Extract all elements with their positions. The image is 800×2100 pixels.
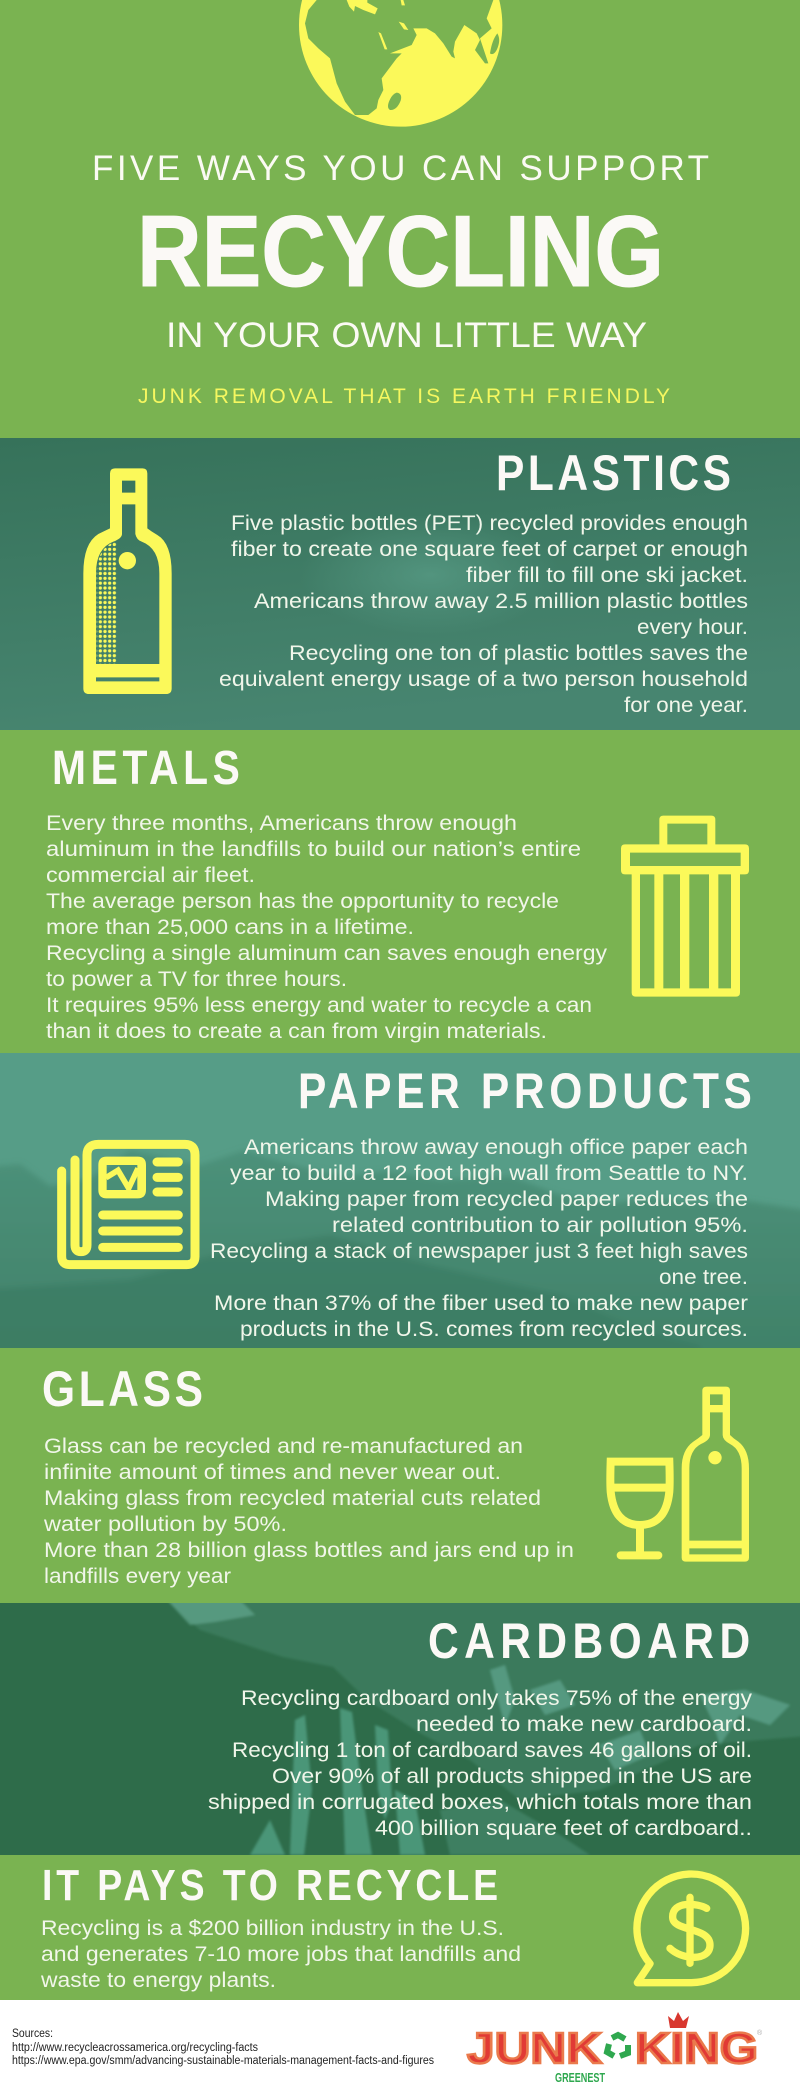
panel: paper products: [0, 1053, 800, 1370]
text block: paper facts: Americans throw away enough office paper each: [244, 1136, 748, 1159]
text block: cardboard facts: [208, 1687, 753, 1840]
text block: glass facts: Glass can be recycled and re-manufactured an: [44, 1435, 523, 1458]
panel: metals: [0, 730, 800, 1053]
heading: glass: GLASS: [42, 1361, 203, 1417]
text block: metals facts: to power a TV for three hours.: [46, 968, 347, 991]
heading: paper products: PAPER PRODUCTS: [298, 1063, 752, 1119]
icon: dollar speech bubble: [637, 1874, 746, 1983]
text block: cardboard facts: 400 billion square feet of cardboard..: [375, 1817, 752, 1840]
text block: metals facts: aluminum in the landfills to build our nation’s entire: [46, 838, 581, 861]
text block: paper facts: related contribution to air pollution 95%.: [332, 1214, 748, 1237]
text block: glass facts: infinite amount of times and never wear out.: [44, 1461, 501, 1484]
text block: sources: https://www.epa.gov/smm/advancing-sustainable-materials-management-facts-and-figures: [12, 2055, 434, 2067]
heading: it pays to recycle: IT PAYS TO RECYCLE: [42, 1860, 498, 1910]
text block: plastics facts: fiber to create one square feet of carpet or enough: [231, 538, 748, 561]
text block: glass facts: Making glass from recycled material cuts related: [44, 1487, 541, 1510]
logo: junk king: JUNK: [467, 2024, 602, 2073]
text block: paper facts: products in the U.S. comes from recycled sources.: [240, 1318, 748, 1341]
text block: metals facts: commercial air fleet.: [46, 864, 255, 887]
footer panel: [0, 2000, 800, 2100]
text block: paper facts: More than 37% of the fiber used to make new paper: [214, 1292, 748, 1315]
text block: cardboard facts: needed to make new cardboard.: [416, 1713, 752, 1736]
panel: it pays to recycle: [0, 1855, 800, 2000]
text block: cardboard facts: Recycling 1 ton of cardboard saves 46 gallons of oil.: [232, 1739, 752, 1762]
text block: pays facts: [40, 1917, 521, 1992]
text block: glass facts: water pollution by 50%.: [43, 1513, 287, 1536]
text block: paper facts: one tree.: [659, 1266, 748, 1289]
text block: plastics facts: fiber fill to fill one ski jacket.: [466, 564, 748, 587]
text block: pays facts: waste to energy plants.: [40, 1969, 276, 1992]
logo: junk king: [467, 2012, 763, 2085]
text block: plastics facts: equivalent energy usage of a two person household: [219, 668, 748, 691]
mountain backdrop: [167, 1600, 800, 1855]
text block: paper facts: Recycling a stack of newspaper just 3 feet high saves: [210, 1240, 748, 1263]
logo subtitle: GREENEST: [555, 2070, 605, 2085]
text block: plastics facts: [219, 512, 748, 717]
icon: plastic bottle: [83, 468, 172, 694]
text block: plastics facts: Five plastic bottles (PET) recycled provides enough: [231, 512, 748, 535]
icon: yellow globe: [299, 0, 502, 127]
main title: RECYCLING: [137, 196, 664, 308]
text block: cardboard facts: Recycling cardboard only takes 75% of the energy: [241, 1687, 753, 1710]
text block: paper facts: Making paper from recycled paper reduces the: [265, 1188, 748, 1211]
header panel: [0, 0, 800, 438]
icon: crown: [668, 2012, 689, 2028]
text block: glass facts: landfills every year: [44, 1565, 231, 1588]
logo: junk king: KING: [635, 2024, 758, 2073]
text block: pays facts: and generates 7-10 more jobs that landfills and: [41, 1943, 521, 1966]
text block: metals facts: than it does to create a can from virgin materials.: [46, 1020, 547, 1043]
heading: metals: METALS: [52, 742, 240, 795]
text block: metals facts: Every three months, Americans throw enough: [46, 812, 517, 835]
text block: pays facts: Recycling is a $200 billion industry in the U.S.: [41, 1917, 504, 1940]
panel: cardboard: [0, 1600, 800, 1855]
text block: plastics facts: Americans throw away 2.5 million plastic bottles: [254, 590, 748, 613]
text block: glass facts: [43, 1435, 574, 1588]
heading: plastics: PLASTICS: [496, 445, 731, 501]
text block: metals facts: more than 25,000 cans in a lifetime.: [46, 916, 414, 939]
text block: cardboard facts: Over 90% of all products shipped in the US are: [272, 1765, 752, 1788]
heading line: little way: IN YOUR OWN LITTLE WAY: [166, 316, 647, 355]
heading: cardboard: CARDBOARD: [428, 1613, 750, 1669]
text block: plastics facts: for one year.: [624, 694, 748, 717]
text block: plastics facts: every hour.: [637, 616, 748, 639]
text block: metals facts: [46, 812, 608, 1043]
mountains backdrop: [0, 1152, 800, 1348]
text block: plastics facts: Recycling one ton of plastic bottles saves the: [289, 642, 748, 665]
panel: glass: [0, 1348, 800, 1603]
icon: newspaper: [62, 1144, 195, 1265]
tagline: JUNK REMOVAL THAT IS EARTH FRIENDLY: [138, 385, 670, 408]
registered mark: ®: [757, 2029, 763, 2037]
icon: recycling arrows: [607, 2035, 628, 2056]
panel: plastics: [0, 438, 800, 730]
text block: sources: http://www.recycleacrossamerica.org/recycling-facts: [12, 2042, 258, 2054]
text block: glass facts: More than 28 billion glass bottles and jars end up in: [44, 1539, 574, 1562]
text block: metals facts: The average person has the opportunity to recycle: [46, 890, 559, 913]
text block: metals facts: It requires 95% less energy and water to recycle a can: [46, 994, 592, 1017]
text block: cardboard facts: shipped in corrugated boxes, which totals more than: [208, 1791, 752, 1814]
text block: metals facts: Recycling a single aluminum can saves enough energy: [46, 942, 608, 965]
icon: wine glass and bottle: [610, 1387, 749, 1562]
text block: paper facts: year to build a 12 foot high wall from Seattle to NY.: [230, 1162, 748, 1185]
text block: sources: Sources:: [12, 2028, 53, 2040]
icon: trash can: [621, 816, 749, 997]
text block: sources: [12, 2028, 434, 2067]
heading line: five ways: FIVE WAYS YOU CAN SUPPORT: [92, 149, 709, 188]
text block: paper facts: [210, 1136, 748, 1341]
